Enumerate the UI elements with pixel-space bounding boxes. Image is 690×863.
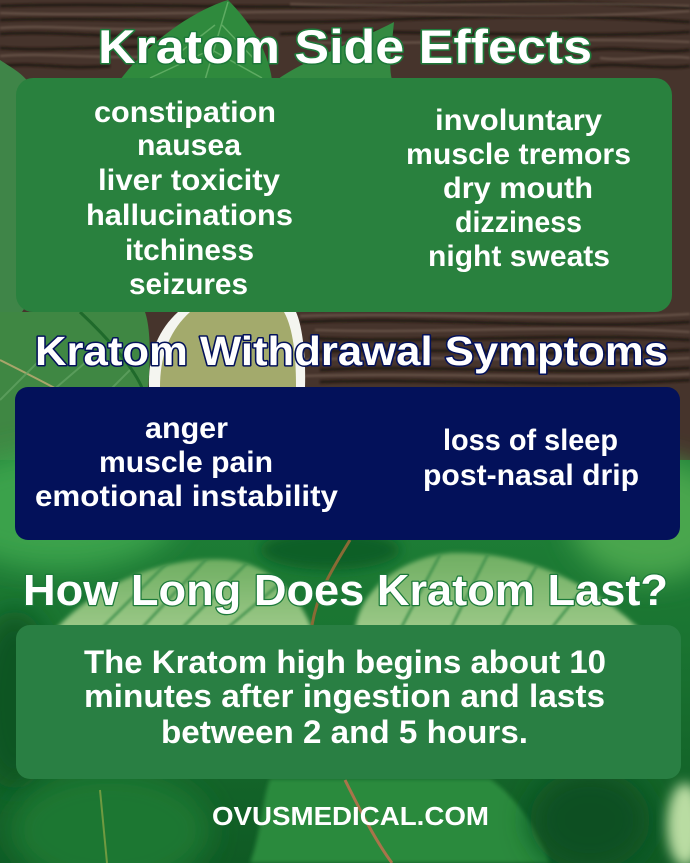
- background: wood planks: [0, 0, 690, 460]
- duration text: between 2 and 5 hours.: [161, 714, 528, 750]
- heading: Kratom Withdrawal Symptoms: Kratom Withdrawal Symptoms: [35, 328, 668, 374]
- leaf: top centre: [120, 0, 272, 80]
- right list of side effects: muscle tremors: [406, 138, 631, 171]
- lower central leaf: [250, 779, 550, 863]
- left list of side effects: constipation: [94, 96, 276, 129]
- right list of side effects: [406, 104, 631, 273]
- duration text: The Kratom high begins about 10: [84, 644, 606, 680]
- leaf veins: [102, 555, 583, 625]
- left list of symptoms: emotional instability: [35, 480, 338, 513]
- left list of side effects: itchiness: [125, 234, 254, 267]
- right list of symptoms: loss of sleep: [443, 424, 618, 457]
- footer: website: OVUSMEDICAL.COM: [212, 801, 489, 831]
- right list of side effects: involuntary: [435, 104, 602, 137]
- bowl of kratom powder: [149, 312, 305, 387]
- right list of symptoms: post-nasal drip: [423, 459, 639, 492]
- right list of side effects: dry mouth: [443, 172, 593, 205]
- lower dark left: [10, 770, 210, 863]
- stem: [312, 540, 350, 625]
- left list of symptoms: [35, 412, 338, 513]
- panel: withdrawal symptoms: [15, 387, 680, 540]
- left list of side effects: liver toxicity: [98, 164, 280, 197]
- background: blurred green leaves: [0, 450, 690, 863]
- panel: duration: [16, 625, 681, 779]
- duration text: [84, 644, 606, 750]
- left list of side effects: [86, 96, 293, 301]
- left list of side effects: hallucinations: [86, 199, 293, 232]
- pale blob corner: [667, 783, 690, 863]
- background: kratom leaves on wood: [0, 0, 394, 460]
- right dark: [530, 770, 650, 863]
- heading: How Long Does Kratom Last?: How Long Does Kratom Last?: [23, 566, 668, 615]
- duration text: minutes after ingestion and lasts: [84, 678, 605, 714]
- left list of symptoms: muscle pain: [99, 446, 273, 479]
- leaf: left upper: [0, 60, 30, 345]
- title: Kratom Side Effects: Kratom Side Effects: [98, 20, 592, 73]
- leaf: top small: [277, 22, 394, 80]
- leaf: left lower: [0, 312, 150, 460]
- pale leaf left: [55, 559, 312, 630]
- left list of symptoms: anger: [145, 412, 228, 445]
- right list of symptoms: [423, 424, 639, 492]
- pale leaf right: [355, 553, 640, 630]
- right list of side effects: dizziness: [455, 206, 582, 239]
- panel: side effects: [16, 78, 672, 312]
- lower stem: [345, 780, 392, 863]
- left list of side effects: nausea: [137, 129, 241, 162]
- left list of side effects: seizures: [129, 268, 248, 301]
- right list of side effects: night sweats: [428, 240, 610, 273]
